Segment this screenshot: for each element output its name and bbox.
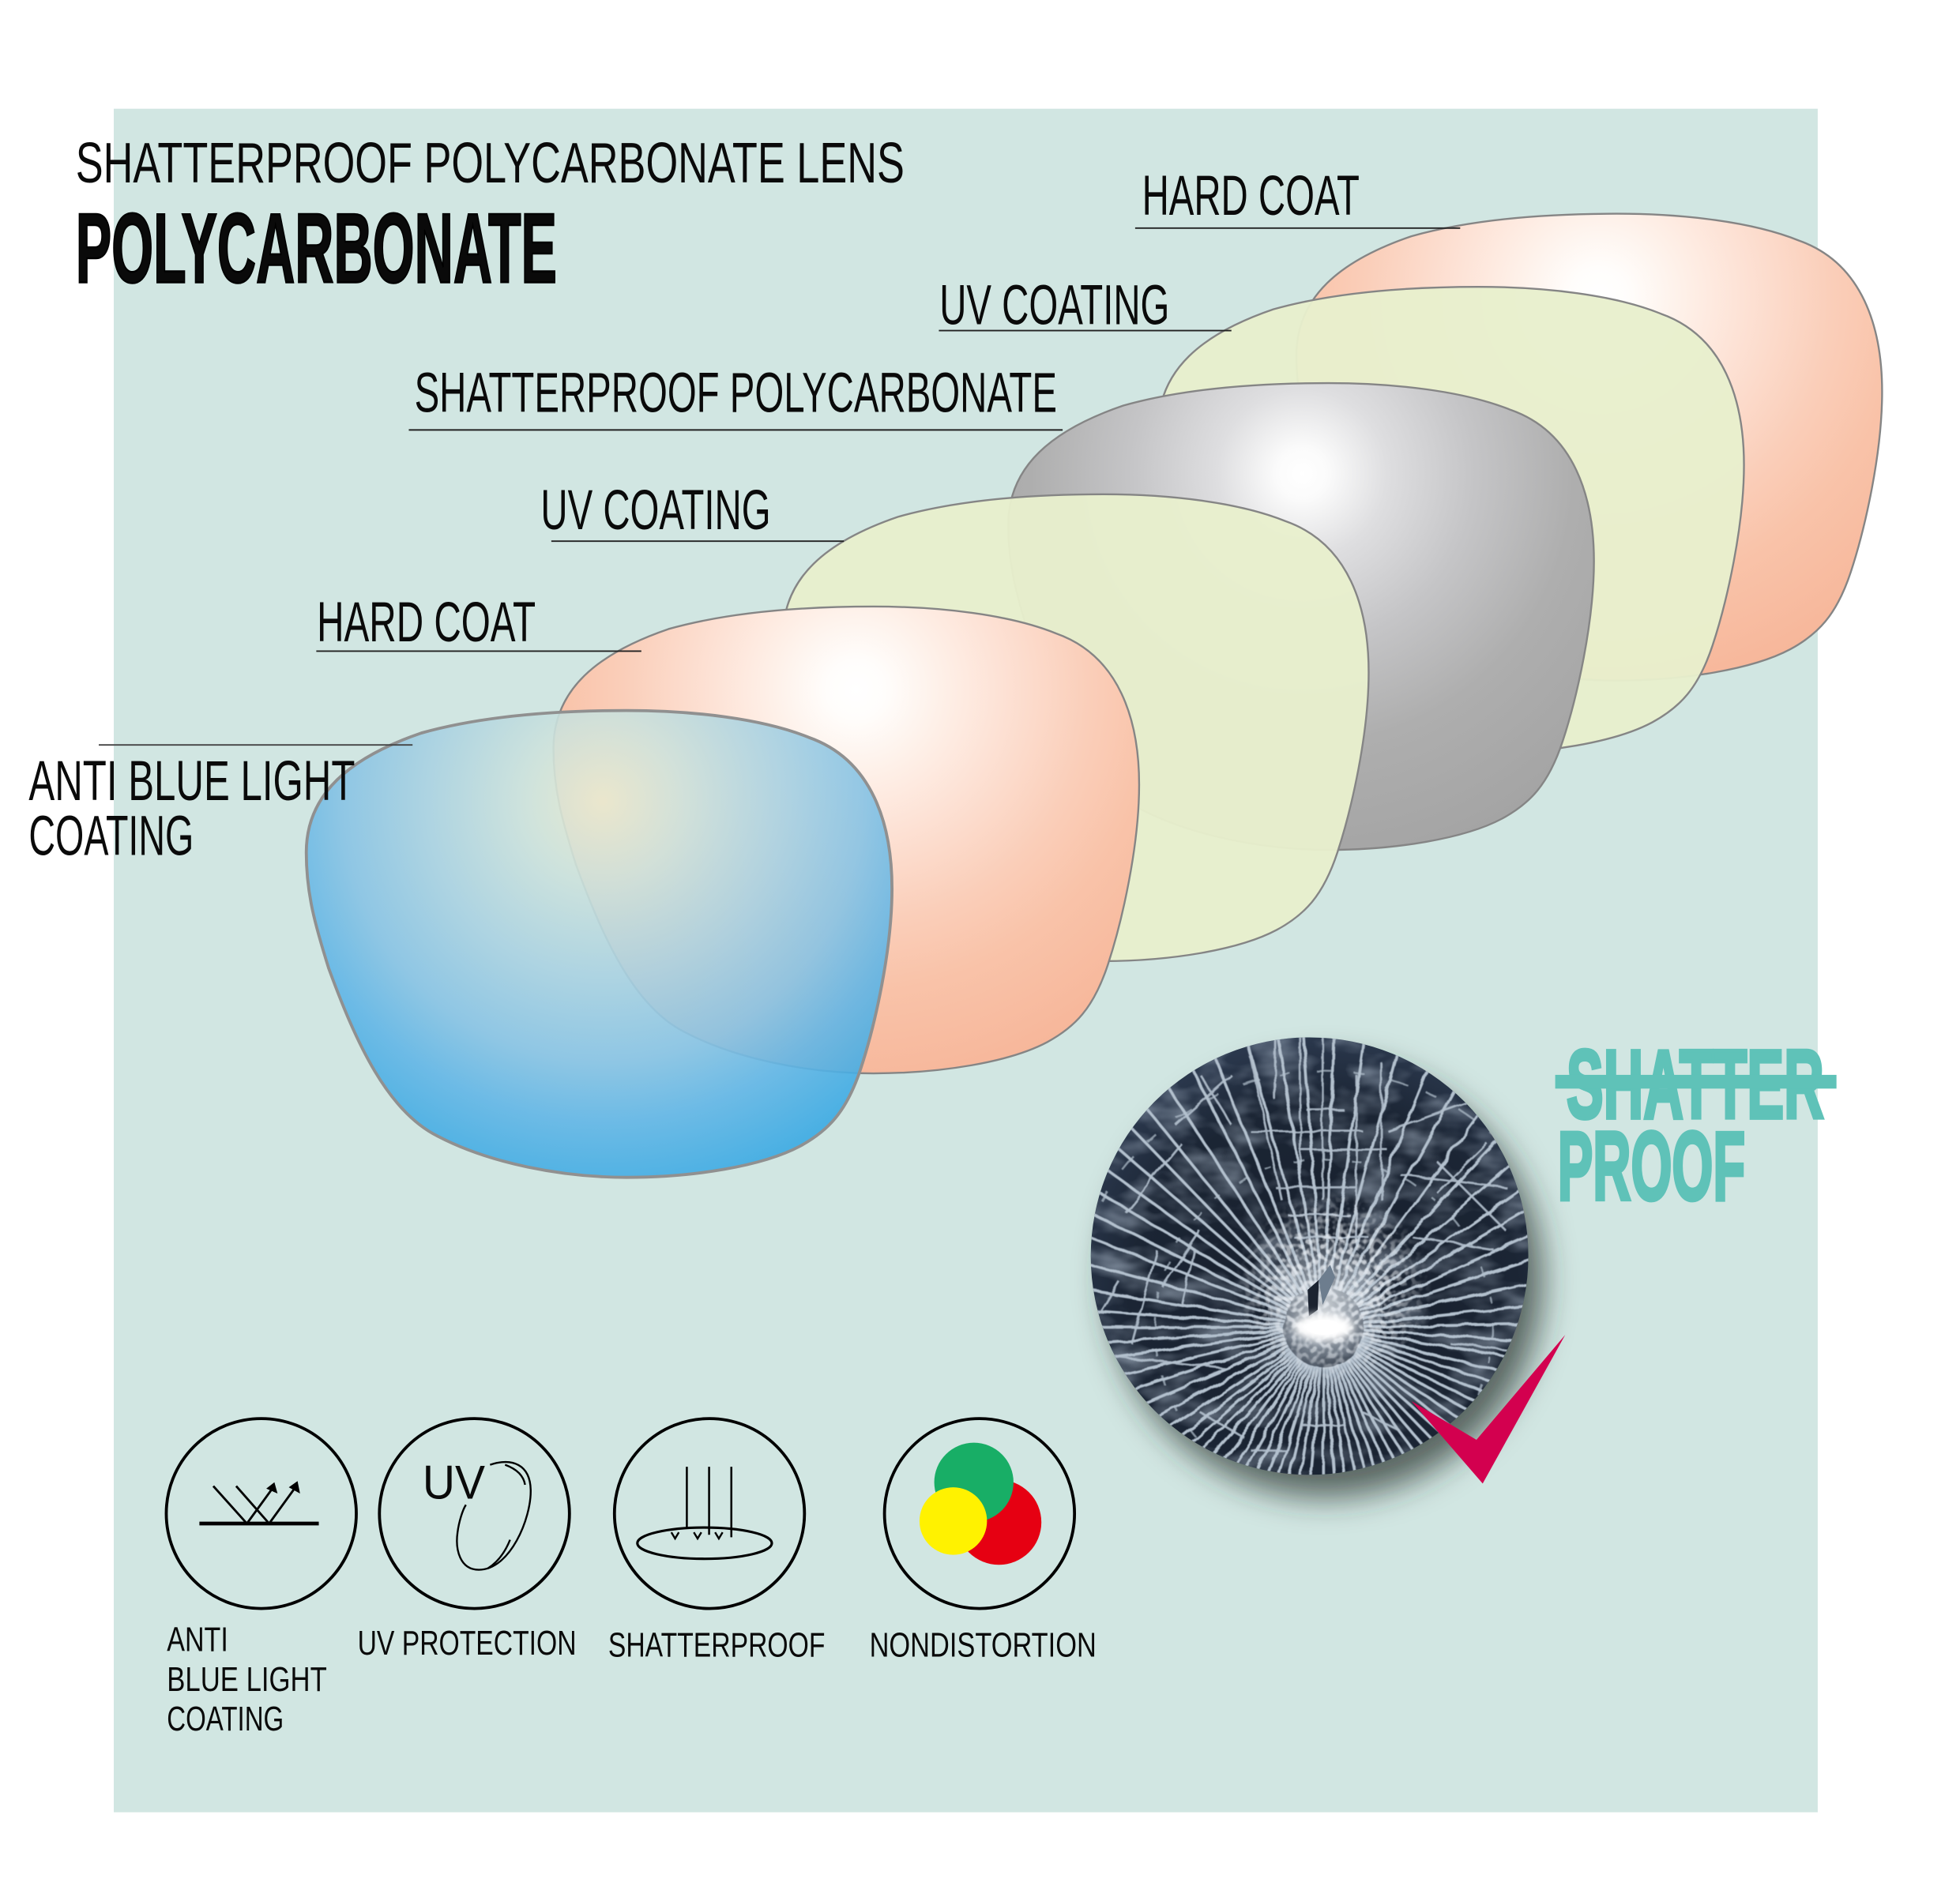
icon label: UV protection: UV PROTECTION — [358, 1625, 577, 1663]
icon: anti blue light coating — [166, 1418, 356, 1609]
icon: UV protection — [379, 1418, 570, 1609]
icon label: nondistortion: NONDISTORTION — [870, 1627, 1097, 1665]
icon: shatterproof — [615, 1418, 804, 1609]
lens: front UV coating — [783, 494, 1368, 961]
icon label: anti blue light coating — [167, 1621, 327, 1738]
lens: anti blue light coating — [307, 711, 892, 1178]
label: UV coating (back): UV COATING — [939, 275, 1169, 337]
checkmark — [1412, 1335, 1565, 1483]
label: UV coating (front): UV COATING — [540, 479, 771, 542]
cracked glass disc — [1090, 1038, 1529, 1475]
label: hard coat (back): HARD COAT — [1142, 165, 1360, 227]
background panel — [114, 109, 1818, 1813]
lens: front hard coat — [554, 607, 1139, 1073]
label: anti blue light coating: ANTI BLUE LIGHT — [28, 750, 355, 813]
heading: POLYCARBONATE — [76, 194, 557, 304]
shatterproof logo — [1556, 1031, 1837, 1221]
icon label: shatterproof: SHATTERPROOF — [608, 1627, 825, 1665]
label: anti blue light coating — [28, 745, 412, 867]
icon label: anti blue light coating: ANTI — [167, 1621, 228, 1659]
shatterproof logo: PROOF — [1558, 1112, 1745, 1221]
icon label: anti blue light coating: BLUE LIGHT — [167, 1661, 327, 1699]
shadow: cracked glass — [1108, 1062, 1543, 1497]
title: SHATTERPROOF POLYCARBONATE LENS — [76, 131, 905, 195]
lens: shatterproof polycarbonate — [1008, 383, 1594, 850]
label: anti blue light coating: COATING — [28, 805, 194, 867]
lens stack — [307, 214, 1882, 1178]
icon: nondistortion — [885, 1418, 1074, 1609]
lens: back hard coat — [1296, 214, 1882, 681]
label: shatterproof polycarbonate: SHATTERPROOF POLYCARBONATE — [415, 362, 1057, 424]
icon: UV protection: UV — [423, 1456, 485, 1509]
label: hard coat (front): HARD COAT — [317, 592, 536, 654]
icon label: anti blue light coating: COATING — [167, 1700, 284, 1738]
lens: back UV coating — [1158, 287, 1744, 753]
